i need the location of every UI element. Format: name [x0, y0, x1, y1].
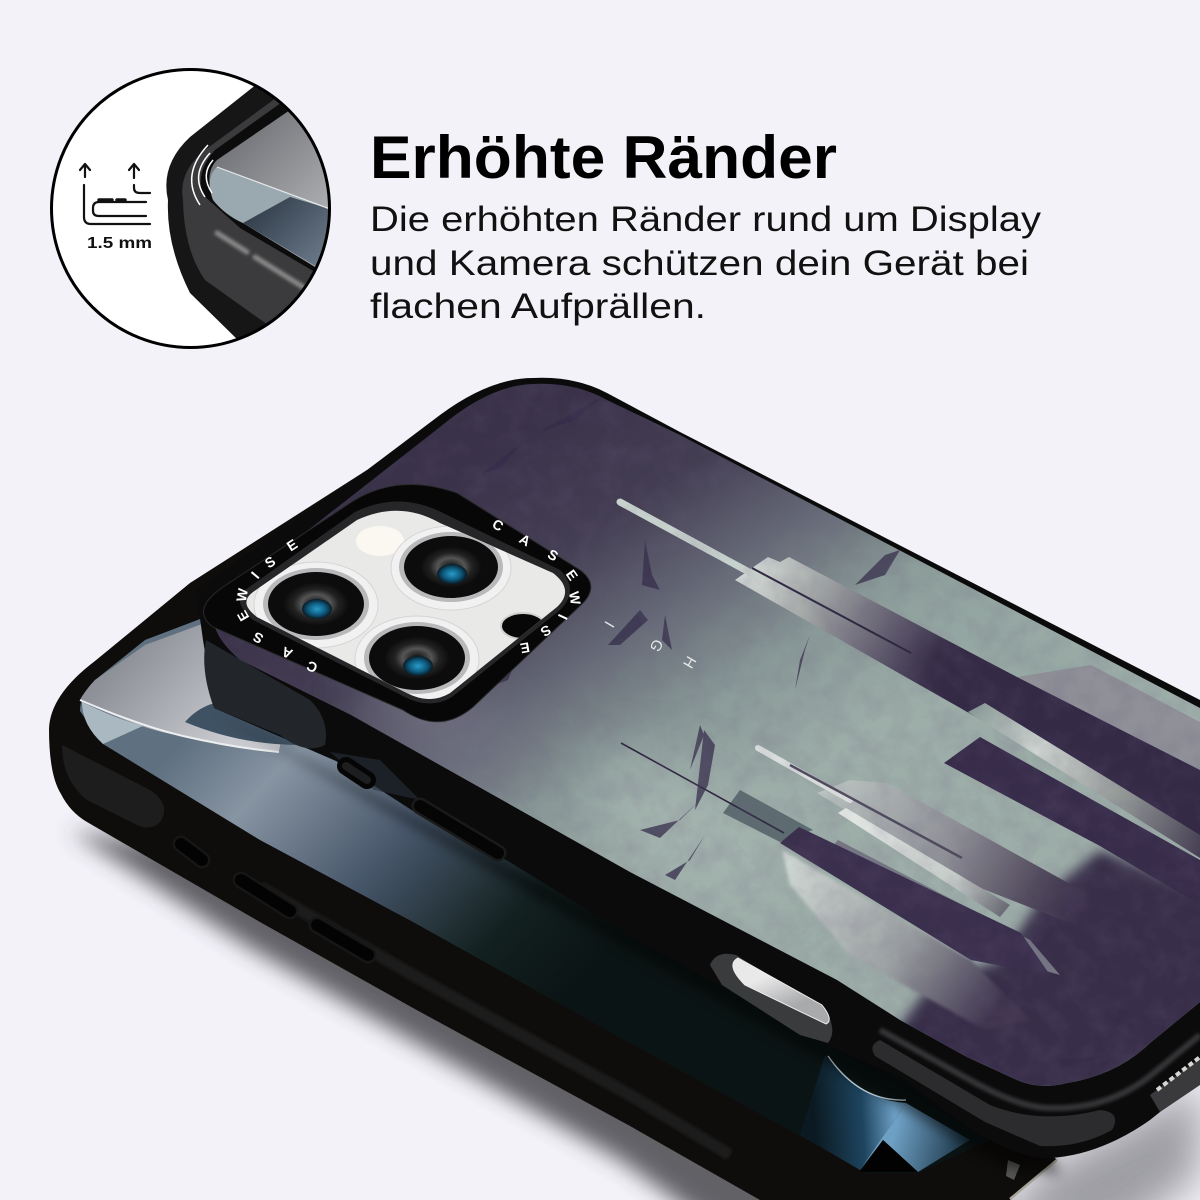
lower phone silver edge	[1010, 1160, 1057, 1199]
ring lettering: C	[304, 658, 320, 676]
side button: volume down	[317, 925, 368, 955]
case rim highlight	[880, 1030, 1200, 1108]
description text: Die erhöhten Ränder rund um Display	[370, 200, 1042, 239]
stepped block two	[817, 780, 1074, 918]
ring lettering: S	[545, 546, 561, 564]
teal step	[723, 790, 813, 842]
ring lettering: E	[563, 567, 581, 583]
impact arcs	[192, 145, 213, 205]
screen swoosh	[80, 700, 279, 752]
side button: volume up	[241, 880, 290, 911]
pale wedge	[82, 702, 145, 744]
colour wash	[347, 554, 1118, 926]
lower phone shadow	[70, 830, 1000, 1200]
top stepped bar	[735, 557, 1200, 845]
purple bar three	[780, 827, 1050, 975]
charging port bezel	[710, 954, 832, 1043]
artwork lettering	[604, 621, 696, 668]
ring lettering: E	[519, 639, 531, 657]
carbon patch bottom	[872, 1040, 1115, 1146]
pill stripe one	[620, 502, 760, 578]
ring lettering: A	[517, 531, 533, 549]
dark line three	[621, 743, 784, 833]
lower grey band	[820, 840, 1060, 975]
camera island	[204, 485, 591, 722]
label: 1.5 mm: 1.5 mm	[87, 235, 152, 252]
blue wallpaper glow	[800, 1055, 906, 1170]
upper bright strip	[1072, 1074, 1099, 1082]
artwork lettering: I	[600, 618, 617, 630]
edge height icon	[80, 164, 150, 224]
description text: und Kamera schützen dein Gerät bei	[370, 244, 1029, 283]
lower phone	[49, 470, 1057, 1200]
ring lettering: I	[555, 612, 571, 622]
flash	[356, 526, 404, 556]
blue wallpaper panel	[860, 1103, 970, 1172]
dark line two	[790, 765, 962, 858]
ring lettering: E	[284, 536, 300, 554]
shadow under upper phone	[214, 712, 1060, 1175]
white stripe three	[838, 808, 1010, 917]
wallpaper triangle	[860, 1140, 918, 1172]
mute switch	[346, 766, 367, 780]
lower port	[1006, 1160, 1020, 1180]
artwork panel	[190, 370, 1200, 1110]
paper texture	[560, 408, 1190, 1034]
purple bar two	[944, 737, 1200, 905]
description text: flachen Aufprällen.	[370, 287, 706, 326]
ring lettering: W	[566, 590, 584, 607]
carbon patch near camera	[204, 640, 326, 748]
upper phone	[196, 378, 1200, 1158]
title: Erhöhte Ränder	[370, 124, 837, 191]
case highlight band	[260, 887, 730, 1155]
lens bottom	[355, 616, 479, 702]
translucent side toward screen	[330, 752, 420, 800]
detail circle: raised edge close-up	[52, 70, 360, 348]
island ring	[204, 485, 591, 722]
screen reflection	[80, 600, 990, 1173]
screen upper grey area	[80, 610, 300, 751]
artwork lettering: G	[646, 636, 666, 655]
lens top	[391, 526, 511, 610]
bottom port	[1150, 1058, 1200, 1112]
power button	[420, 806, 498, 853]
ring lettering: E	[234, 608, 252, 624]
case corner close-up	[166, 86, 328, 338]
ring lettering: W	[233, 586, 251, 603]
pill stripe two	[758, 748, 850, 800]
dark line one	[752, 568, 911, 653]
ring lettering: S	[538, 622, 554, 640]
stripe two	[968, 703, 1200, 858]
grey band	[1017, 665, 1200, 773]
charging port button	[733, 958, 829, 1024]
side button: action	[181, 844, 202, 860]
ring lettering: C	[490, 516, 506, 534]
ring lettering: S	[262, 553, 278, 571]
table shadow right of phones	[990, 1085, 1200, 1200]
lens plate	[246, 511, 565, 699]
lower white fragments	[782, 850, 1030, 1030]
lower phone case	[49, 470, 1057, 1200]
lenses and details	[254, 526, 545, 702]
ring lettering: A	[279, 644, 295, 662]
purple lower right	[890, 850, 1200, 1110]
ring lettering: I	[248, 568, 262, 582]
lens left	[254, 562, 378, 648]
speaker holes	[1157, 1057, 1200, 1090]
ring lettering: S	[250, 629, 266, 647]
upper phone case	[196, 378, 1200, 1158]
carbon corner patch	[62, 745, 164, 828]
paper creases	[498, 397, 900, 880]
description text	[370, 200, 1042, 326]
dark wedge	[185, 702, 300, 745]
microphone sensor	[501, 613, 545, 639]
ring lettering	[233, 516, 584, 676]
inner bevel	[240, 501, 570, 704]
artwork lettering: H	[679, 653, 699, 671]
